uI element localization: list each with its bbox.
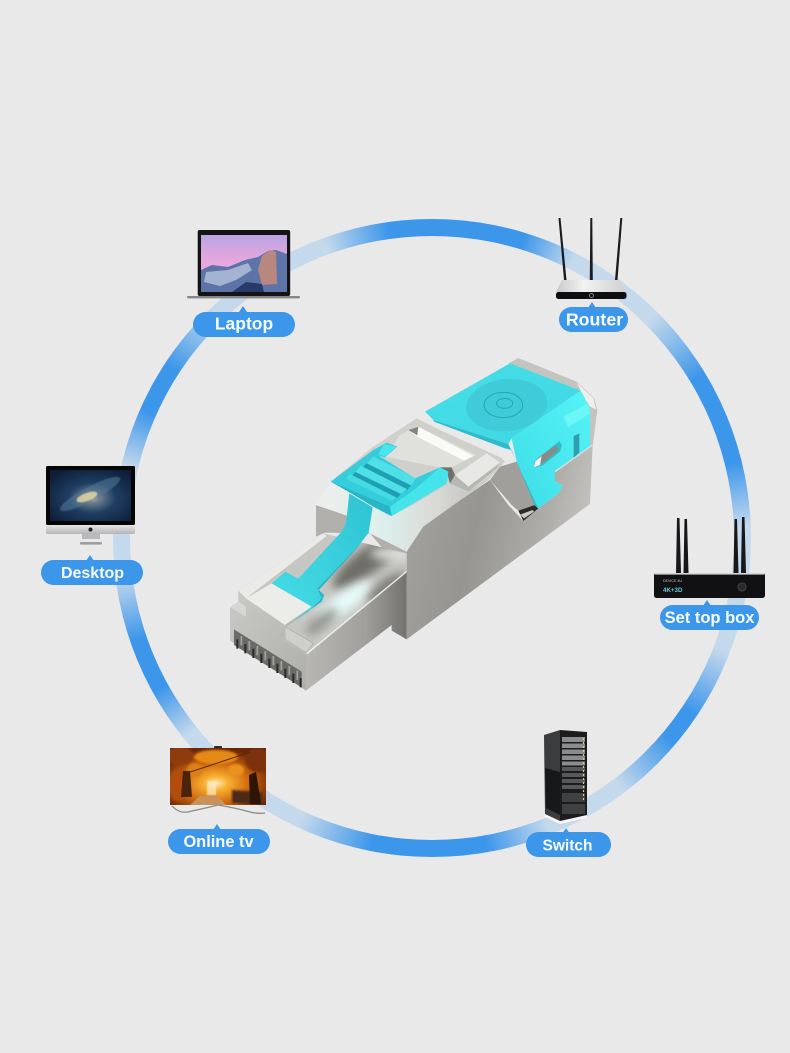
cyan cap <box>425 363 590 508</box>
housing top <box>333 418 505 516</box>
plug notch <box>285 627 313 653</box>
latch grip ribs <box>367 457 416 485</box>
ring: blue gradient connection circle <box>113 219 751 857</box>
body side face <box>407 445 593 639</box>
device: online tv <box>166 746 271 813</box>
connector: RJ45 plug illustration <box>230 358 597 691</box>
illustration layer <box>41 218 765 857</box>
contact pins <box>234 629 302 687</box>
label: Switch: Switch <box>543 838 592 854</box>
label: Switch <box>526 828 611 857</box>
device: set top box <box>654 517 765 598</box>
label: Laptop: Laptop <box>215 314 273 334</box>
label: Online tv: Online tv <box>183 833 254 851</box>
device: laptop <box>187 230 300 298</box>
plug front face <box>230 591 306 691</box>
plug top with reflections <box>238 526 410 654</box>
label: Router <box>559 302 628 332</box>
label: Set top box <box>660 600 759 630</box>
plug white top tab <box>246 583 312 625</box>
label: Desktop <box>41 555 143 585</box>
label: Set top box: Set top box <box>665 609 755 627</box>
device: set top box: 4K+3D <box>663 587 683 594</box>
device: desktop <box>46 466 135 545</box>
label: Router: Router <box>566 310 623 330</box>
body notch tooth highlight <box>555 445 593 472</box>
cap slot holes <box>534 441 562 468</box>
device: set top box: DEVICE 4U <box>663 579 682 583</box>
body chamfer <box>316 479 488 552</box>
device: router <box>556 218 626 299</box>
cap inner wedge <box>490 462 536 511</box>
blue latch <box>272 443 448 622</box>
plug side face <box>306 571 407 691</box>
label: Laptop <box>193 306 295 337</box>
label: Online tv <box>168 824 270 854</box>
device: switch rack <box>544 730 587 824</box>
silver cap rim <box>508 358 597 447</box>
body front shoulder <box>316 505 407 577</box>
cap round badge <box>464 375 550 435</box>
label: Desktop: Desktop <box>61 565 124 582</box>
